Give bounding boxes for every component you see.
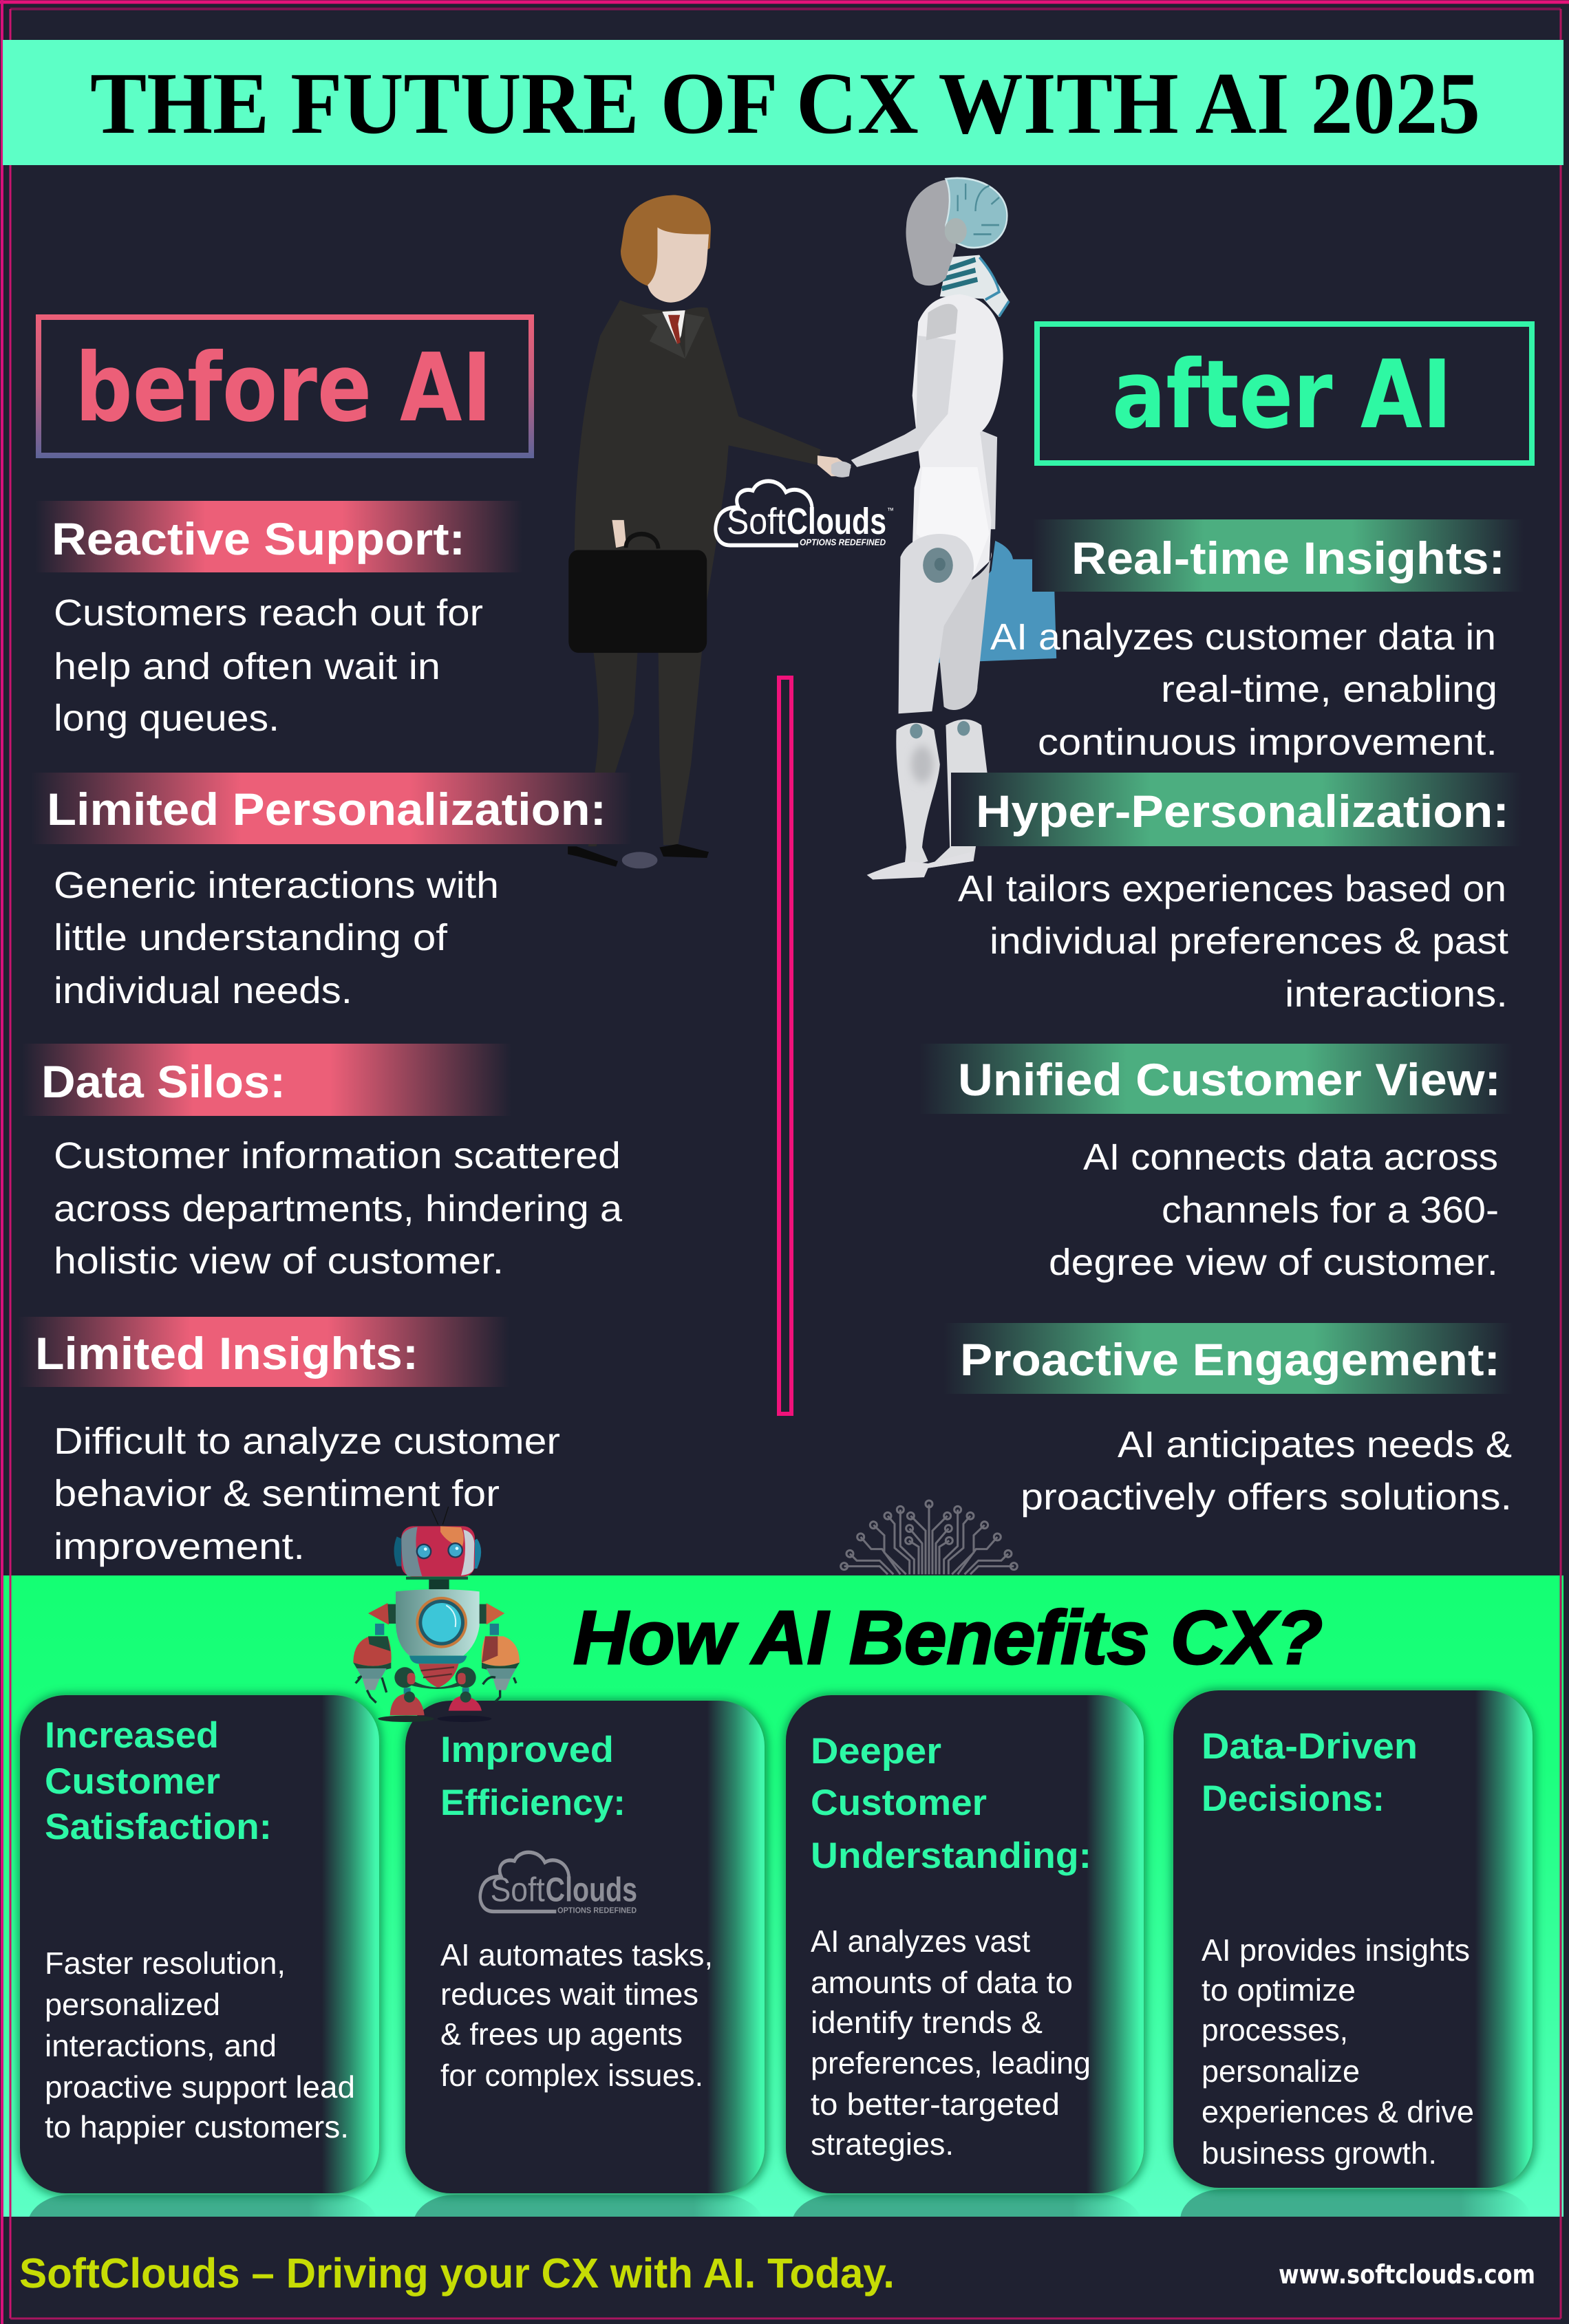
logo: SoftClouds white: Soft — [727, 500, 786, 542]
item: Reactive Support — [35, 501, 522, 739]
card: Improved Efficiency: Improved — [440, 1730, 614, 1770]
item: Unified Customer View: degree view of customer. — [1049, 1242, 1498, 1283]
footer tagline: SoftClouds – Driving your CX with AI. Today. — [19, 2250, 895, 2296]
card: Increased Customer Satisfaction — [20, 1695, 379, 2193]
logo: SoftClouds grey — [480, 1852, 637, 1915]
heading: How AI Benefits CX?: How AI Benefits CX? — [573, 1595, 1323, 1680]
item: Limited Personalization — [31, 773, 632, 1011]
title: THE FUTURE OF CX WITH AI 2025 — [90, 54, 1480, 152]
item: Reactive Support: Customers reach out for — [54, 592, 483, 634]
item: Limited Personalization: Limited Personalization: — [47, 784, 606, 835]
item: Data Silos: holistic view of customer. — [54, 1240, 504, 1282]
illustration: businessman — [568, 195, 851, 868]
item: Proactive Engagement: proactively offers solutions. — [1021, 1476, 1512, 1518]
card: Deeper Customer Understanding: Understanding: — [811, 1836, 1091, 1876]
logo: SoftClouds grey: OPTIONS REDEFINED — [557, 1906, 637, 1915]
card: Deeper Customer Understanding — [786, 1695, 1144, 2193]
card: Improved Efficiency — [405, 1701, 765, 2193]
logo: SoftClouds white: Clouds — [787, 500, 886, 542]
card: Data-Driven Decisions: Data-Driven — [1202, 1726, 1418, 1767]
card: Deeper Customer Understanding: Customer — [811, 1783, 987, 1823]
item: Real-time Insights: Real-time Insights: — [1071, 532, 1505, 583]
heading: before AI — [39, 317, 531, 455]
card: Data-Driven Decisions: processes, — [1202, 2012, 1348, 2047]
item: Hyper-Personalization: AI tailors experiences based on — [958, 868, 1506, 910]
logo: SoftClouds grey: Soft — [491, 1870, 545, 1908]
card: Deeper Customer Understanding: preferences, leading — [811, 2045, 1091, 2080]
item: Limited Personalization: Generic interactions with — [54, 865, 499, 906]
card: Data-Driven Decisions — [1173, 1690, 1533, 2188]
item: Unified Customer View — [919, 1044, 1513, 1283]
card: Increased Customer Satisfaction: Customer — [45, 1761, 220, 1802]
card: Deeper Customer Understanding: to better-targeted — [811, 2087, 1060, 2122]
item: Limited Insights: behavior & sentiment for — [54, 1473, 500, 1514]
item: Real-time Insights: continuous improvement. — [1038, 722, 1497, 763]
item: Hyper-Personalization: Hyper-Personalization: — [976, 786, 1509, 837]
card: Deeper Customer Understanding: amounts of data to — [811, 1965, 1073, 2000]
card: Data-Driven Decisions: AI provides insights — [1202, 1933, 1470, 1968]
item: Data Silos — [22, 1044, 623, 1282]
card: Data-Driven Decisions: experiences & drive — [1202, 2094, 1474, 2129]
item: Reactive Support: Reactive Support: — [52, 513, 465, 564]
item: Reactive Support: help and often wait in — [54, 646, 440, 687]
card: Increased Customer Satisfaction: Satisfaction: — [45, 1807, 272, 1847]
card: Data-Driven Decisions: Decisions: — [1202, 1778, 1385, 1819]
item: Reactive Support: long queues. — [54, 698, 279, 739]
card: Increased Customer Satisfaction: to happier customers. — [45, 2109, 349, 2144]
item: Hyper-Personalization: interactions. — [1285, 973, 1508, 1015]
item: Unified Customer View: channels for a 360- — [1162, 1190, 1499, 1231]
illustration: humanoid robot — [831, 178, 1056, 880]
logo: SoftClouds grey: Clouds — [546, 1870, 637, 1908]
card: Deeper Customer Understanding: identify trends & — [811, 2005, 1043, 2040]
panel: before AI — [18, 317, 632, 1567]
item: Proactive Engagement: Proactive Engagement: — [960, 1334, 1500, 1385]
card: Increased Customer Satisfaction: Increased — [45, 1715, 219, 1756]
card: Improved Efficiency: AI automates tasks, — [440, 1937, 713, 1972]
card: Deeper Customer Understanding: AI analyzes vast — [811, 1924, 1030, 1959]
item: Limited Insights: improvement. — [54, 1526, 305, 1567]
item: Real-time Insights: real-time, enabling — [1161, 669, 1497, 710]
card: Improved Efficiency: for complex issues. — [440, 2058, 703, 2093]
panel: after AI — [919, 324, 1532, 1518]
item: Real-time Insights: AI analyzes customer data in — [990, 616, 1496, 658]
item: Limited Personalization: little understanding of — [54, 917, 448, 958]
card: Improved Efficiency: reduces wait times — [440, 1977, 698, 2012]
icon: cartoon robot — [353, 1507, 520, 1722]
card: Increased Customer Satisfaction: interactions, and — [45, 2028, 277, 2063]
card: Increased Customer Satisfaction: proactive support lead — [45, 2069, 355, 2105]
divider bar — [779, 678, 791, 1414]
logo: SoftClouds white: OPTIONS REDEFINED — [800, 538, 886, 548]
heading: after AI — [1037, 324, 1532, 463]
item: Unified Customer View: AI connects data across — [1083, 1137, 1498, 1178]
item: Unified Customer View: Unified Customer View: — [958, 1054, 1501, 1105]
card: Improved Efficiency: Efficiency: — [440, 1783, 626, 1823]
panel: footer background — [0, 2217, 1569, 2324]
card: Data-Driven Decisions: personalize — [1202, 2054, 1360, 2089]
card: Data-Driven Decisions: business growth. — [1202, 2135, 1437, 2171]
item: Limited Insights: Difficult to analyze customer — [54, 1421, 560, 1462]
card reflections — [28, 2189, 1531, 2257]
heading: before AI: before AI — [75, 334, 492, 443]
item: Data Silos: Customer information scattered — [54, 1135, 621, 1176]
item: Data Silos: across departments, hindering a — [54, 1188, 623, 1229]
title banner — [3, 40, 1563, 165]
panel: benefits band — [3, 1575, 1563, 2217]
item: Hyper-Personalization — [951, 773, 1522, 1015]
card shadows — [19, 1689, 1535, 2196]
card: Deeper Customer Understanding: strategies. — [811, 2127, 954, 2162]
item: Data Silos: Data Silos: — [41, 1056, 286, 1107]
item: Proactive Engagement — [943, 1323, 1513, 1518]
card: Deeper Customer Understanding: Deeper — [811, 1731, 941, 1772]
logo: SoftClouds white — [716, 481, 894, 548]
item: Limited Insights: Limited Insights: — [35, 1328, 418, 1379]
item: Proactive Engagement: AI anticipates needs & — [1118, 1424, 1512, 1465]
icon: circuit tree — [841, 1500, 1017, 1574]
item: Hyper-Personalization: individual preferences & past — [990, 921, 1508, 962]
item: Limited Personalization: individual needs. — [54, 970, 352, 1011]
item: Real-time Insights — [990, 519, 1524, 763]
card: Increased Customer Satisfaction: personalized — [45, 1987, 220, 2022]
card: Improved Efficiency: & frees up agents — [440, 2016, 683, 2052]
logo: SoftClouds white: ™ — [887, 506, 894, 515]
heading: after AI: after AI — [1112, 341, 1452, 450]
card: Increased Customer Satisfaction: Faster resolution, — [45, 1946, 286, 1981]
card: Data-Driven Decisions: to optimize — [1202, 1972, 1356, 2008]
item: Limited Insights — [18, 1317, 560, 1567]
